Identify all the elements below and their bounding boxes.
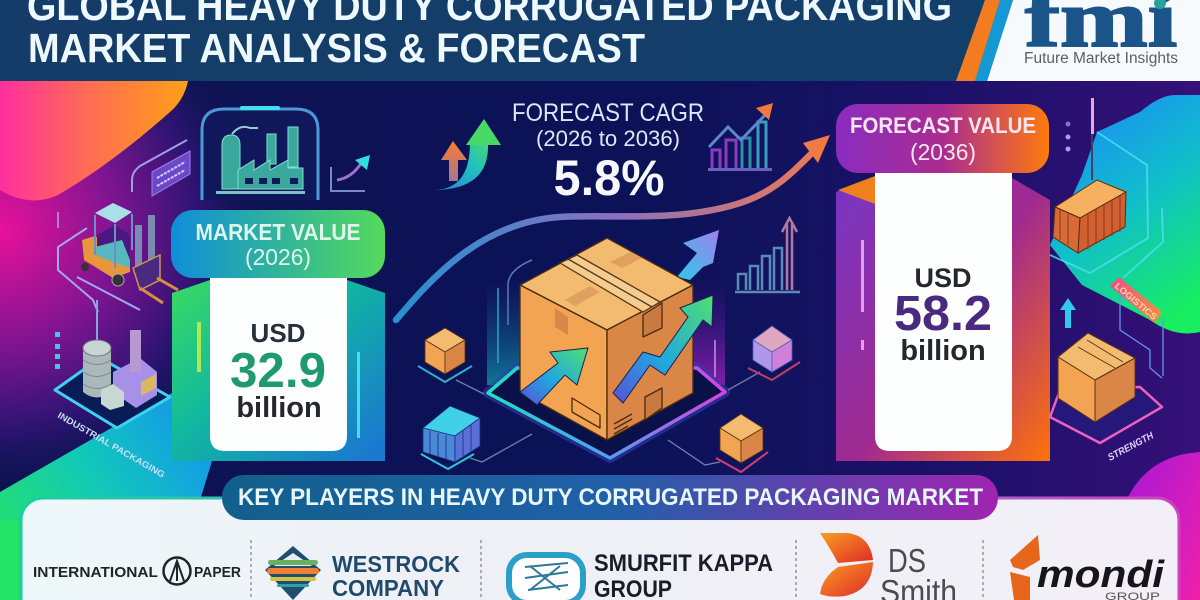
CAGR text: (2026 to 2036)	[536, 126, 680, 151]
icon: small growth chart	[331, 155, 370, 191]
label tag with connector	[132, 140, 190, 196]
thin decorative frame lines near box	[498, 260, 715, 377]
logo: Smurfit Kappa Group	[509, 550, 773, 600]
icon: small box left	[418, 328, 472, 382]
white value card	[875, 173, 1012, 451]
value text	[894, 263, 992, 367]
icon: purple cube	[748, 326, 800, 380]
pill heading	[836, 104, 1049, 173]
icon: up arrow	[1060, 298, 1076, 328]
panel backing	[836, 178, 1050, 461]
lower-right magenta blob	[1128, 452, 1200, 600]
logo: International Paper: INTERNATIONAL	[33, 564, 158, 581]
icon: factory in frame	[202, 106, 318, 200]
value text: 32.9	[230, 344, 326, 398]
icon: status dots	[55, 332, 60, 369]
logo: DS Smith	[820, 533, 957, 600]
logo: DS Smith: DS	[888, 542, 926, 579]
backdrop glow behind box right	[693, 280, 725, 385]
logo white area	[987, 0, 1200, 81]
value text: billion	[236, 392, 322, 424]
icon: arrow on box left	[520, 348, 588, 405]
pill heading: (2026)	[245, 244, 311, 270]
logo: Smurfit Kappa Group: SMURFIT KAPPA	[594, 550, 773, 577]
circuit lines on right	[1120, 295, 1163, 378]
logo: International Paper	[33, 558, 241, 584]
orange-pink blob	[0, 81, 188, 200]
left green strip	[0, 520, 24, 600]
value text: USD	[251, 318, 305, 348]
blue stripe	[975, 0, 1013, 81]
pill heading: MARKET VALUE	[196, 219, 360, 245]
neon accents	[197, 322, 360, 438]
orange stripe	[956, 0, 1000, 81]
icon: forklift	[58, 203, 178, 312]
icon: bar chart with orange arrow	[708, 103, 773, 171]
icon: small box right	[716, 414, 768, 472]
CAGR text	[512, 99, 704, 206]
icon: tank and plant on neon platform	[55, 300, 170, 428]
icon: bar chart right of box	[735, 218, 800, 292]
value text: billion	[900, 335, 986, 367]
icon: blue container	[421, 406, 480, 469]
players card	[21, 498, 1179, 600]
connector lines	[456, 372, 760, 465]
neon accents	[861, 240, 864, 350]
label: industrial packaging: INDUSTRIAL PACKAGING	[56, 410, 167, 480]
neon platform under main box	[488, 368, 725, 458]
white value card	[210, 278, 347, 451]
value text: USD	[914, 263, 972, 293]
title: MARKET ANALYSIS & FORECAST	[28, 25, 645, 71]
header bar	[0, 0, 1200, 81]
value text: 58.2	[894, 287, 992, 341]
logo: Mondi Group: mondi	[1037, 554, 1166, 596]
backdrop glow behind box left	[487, 280, 521, 385]
tag: logistics: LOGISTICS	[1113, 281, 1159, 322]
right teal field	[1050, 95, 1200, 334]
left magenta glow	[0, 81, 300, 481]
lower-left teal field	[0, 393, 212, 540]
banner heading	[222, 475, 998, 520]
logo: International Paper: PAPER	[194, 564, 241, 581]
logo: Future Market Insights: Future Market Insights	[1024, 50, 1178, 67]
icon: dots and beam	[1066, 98, 1094, 152]
pill heading: (2036)	[910, 139, 976, 165]
title	[27, 0, 952, 71]
icon: zigzag arrow on box right	[613, 295, 713, 403]
CAGR text: FORECAST CAGR	[512, 99, 704, 127]
hexagon outline on right field	[1050, 132, 1163, 278]
logo: WestRock Company	[265, 546, 460, 600]
CAGR text: 5.8%	[554, 150, 664, 206]
panel: forecast value	[836, 104, 1050, 461]
logo: WestRock Company: WESTROCK	[332, 551, 460, 577]
orange fold	[838, 176, 875, 204]
icon: box on pink platform	[1050, 333, 1162, 443]
pill heading: FORECAST VALUE	[850, 113, 1036, 138]
icon: orange shipping container	[1053, 134, 1126, 253]
growth curve arrow	[396, 135, 830, 320]
icon: blue arrow behind box	[677, 230, 719, 280]
pill heading	[171, 210, 385, 278]
icon: rising arrows	[433, 119, 501, 190]
panel: key players	[21, 475, 1179, 600]
icon: main corrugated box	[520, 238, 693, 440]
value text	[230, 318, 326, 424]
logo: Mondi Group	[1010, 535, 1166, 600]
logo dividers	[251, 540, 983, 600]
panel backing	[172, 280, 385, 461]
label: strength: STRENGTH	[1106, 430, 1156, 464]
banner heading: KEY PLAYERS IN HEAVY DUTY CORRUGATED PACKAGING MARKET	[238, 484, 983, 511]
panel: market value	[171, 210, 385, 461]
